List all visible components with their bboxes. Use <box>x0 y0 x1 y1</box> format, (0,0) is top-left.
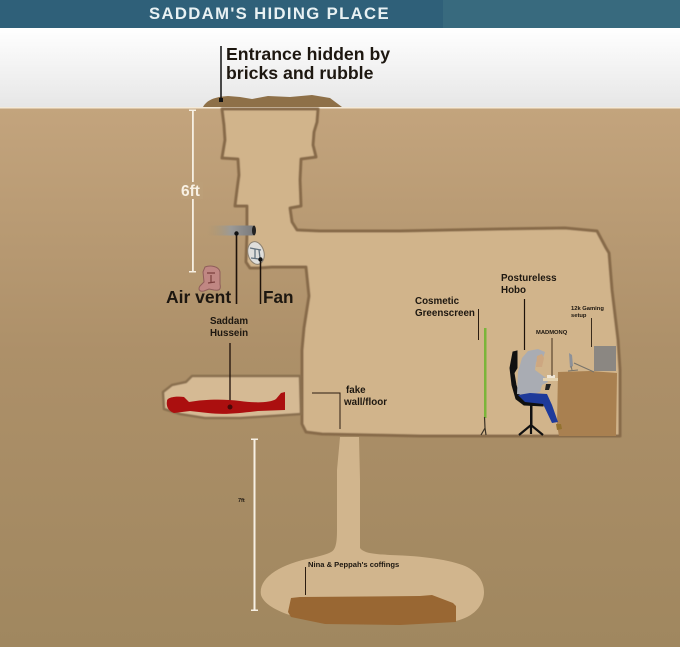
entrance label: Entrance hidden by <box>226 44 390 64</box>
saddam label: Saddam <box>210 316 248 327</box>
fake wall label: wall/floor <box>343 397 387 408</box>
face <box>536 354 544 367</box>
keyboard <box>543 378 558 381</box>
lower chamber and shaft <box>261 437 484 621</box>
legs <box>518 393 558 423</box>
fan label: Fan <box>263 287 294 307</box>
desk <box>557 371 617 436</box>
mouse hand <box>545 384 551 390</box>
burial chamber <box>163 376 301 418</box>
greenscreen label: Cosmetic <box>415 296 460 307</box>
greenscreen label: Greenscreen <box>415 308 475 319</box>
entrance label: bricks and rubble <box>226 63 374 83</box>
sky <box>0 28 680 108</box>
body <box>517 349 548 395</box>
foot <box>556 424 562 430</box>
saddam label: Hussein <box>210 328 248 339</box>
air vent label <box>166 231 239 307</box>
ground surface line <box>0 107 680 108</box>
hobo label: Hobo <box>501 285 526 296</box>
red body figure <box>167 392 285 414</box>
7ft measure: 7ft <box>238 498 245 504</box>
header banner <box>0 0 680 28</box>
person at desk <box>510 349 562 435</box>
hobo label <box>501 273 557 350</box>
saddam label <box>210 316 248 407</box>
icon: air vent pipe <box>207 226 256 236</box>
tunnel network <box>222 109 620 436</box>
green screen stand <box>481 328 486 435</box>
fake wall label <box>312 385 387 429</box>
chair <box>510 351 543 406</box>
6ft measure: 6ft <box>181 183 200 200</box>
fake wall label: fake <box>346 385 366 396</box>
coffins label: Nina & Peppah's coffings <box>308 560 399 569</box>
title: SADDAM'S HIDING PLACE <box>149 4 390 23</box>
greenscreen label <box>415 296 478 340</box>
madmonq label: MADMONQ <box>536 330 568 336</box>
entrance mound <box>203 95 342 107</box>
hobo label: Postureless <box>501 273 557 284</box>
gaming setup label <box>571 306 604 347</box>
air vent label: Air vent <box>166 287 231 307</box>
coffins label <box>306 560 399 595</box>
icon: fan <box>245 240 267 266</box>
gaming setup label: setup <box>571 313 587 319</box>
gaming setup label: 12k Gaming <box>571 306 604 312</box>
monitor <box>568 353 594 372</box>
6ft measure <box>181 110 203 272</box>
icon: small pink figure <box>199 266 220 291</box>
fan label <box>258 257 294 307</box>
madmonq label <box>536 330 568 376</box>
coffins <box>288 595 456 625</box>
entrance label <box>219 44 390 102</box>
gaming pc <box>594 346 616 371</box>
